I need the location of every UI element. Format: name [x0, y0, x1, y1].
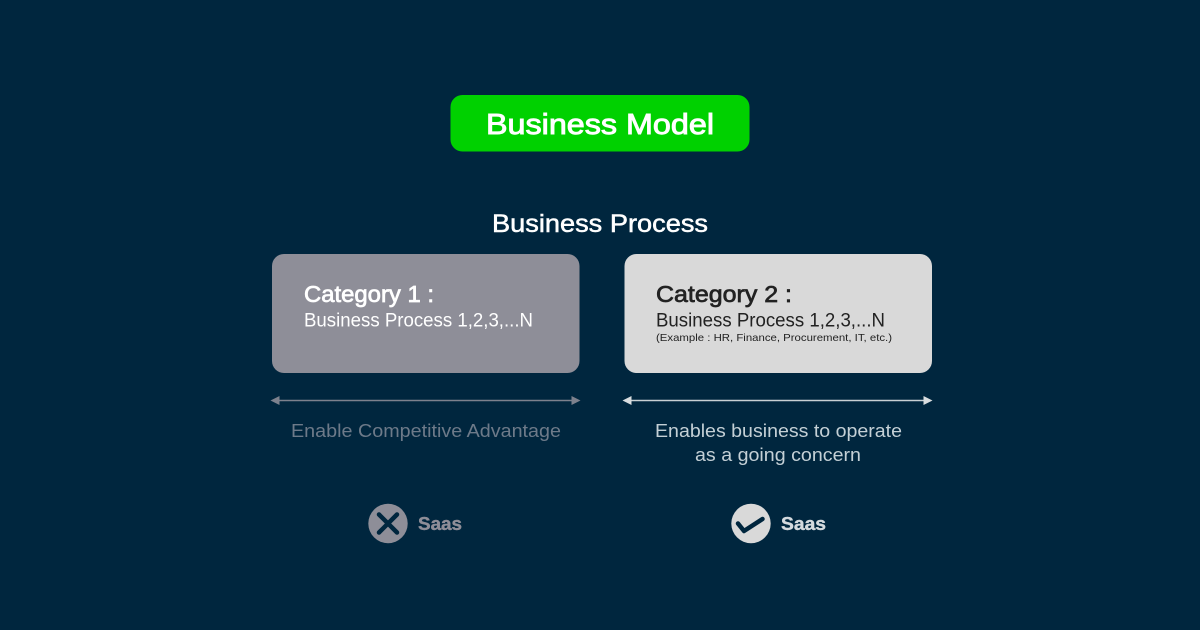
heading: Business Process: Business Process: [492, 210, 708, 238]
panel: category 2: [624, 254, 932, 373]
panel: category 2: (Example : HR, Finance, Procurement, IT, etc.): [656, 332, 892, 344]
icon: check: [731, 504, 771, 543]
button: Business Model: Business Model: [486, 109, 714, 141]
icon: cross: [368, 504, 408, 543]
panel: category 1: Business Process 1,2,3,...N: [304, 310, 533, 332]
panel: category 2: Category 2 :: [656, 281, 792, 307]
arrow: category 1 range: [270, 396, 580, 405]
panel: category 1: [272, 254, 580, 373]
arrow: category 2 range: [622, 396, 932, 405]
text: enables business to operate: Enables business to operate: [655, 420, 902, 441]
panel: category 2: Business Process 1,2,3,...N: [656, 310, 885, 332]
label: Saas not applicable: Saas: [418, 514, 462, 534]
button: Business Model: [450, 95, 750, 152]
text: enable competitive advantage: Enable Competitive Advantage: [291, 420, 561, 441]
text: enables business to operate: [655, 420, 902, 465]
text: enables business to operate: as a going concern: [695, 444, 861, 465]
panel: category 1: Category 1 :: [304, 281, 434, 307]
label: Saas applicable: Saas: [781, 514, 826, 534]
